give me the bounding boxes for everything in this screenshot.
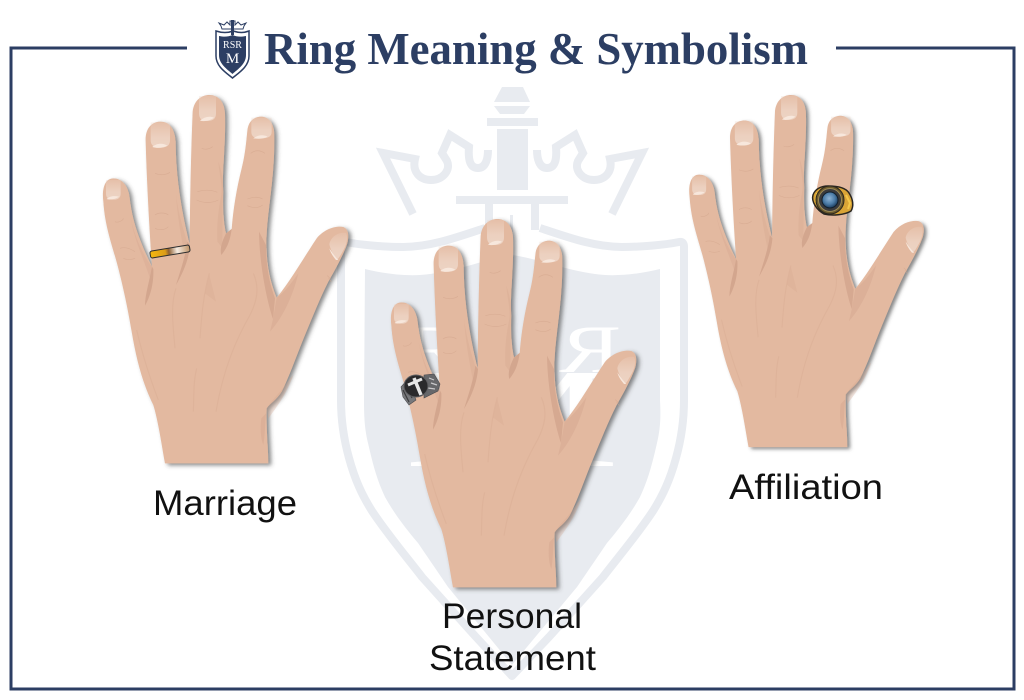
label: Marriage: Marriage — [153, 484, 297, 523]
watermark: monogram: R — [404, 311, 467, 387]
icon: class ring with blue stone — [813, 186, 853, 215]
icon: gold wedding band — [150, 245, 190, 258]
title logo: shield crest — [216, 20, 249, 78]
watermark: sword — [456, 87, 568, 232]
icon: silver cross ring — [401, 374, 440, 405]
watermark: shield crest — [341, 87, 684, 676]
label: Personal Statement: Statement — [429, 639, 596, 678]
watermark: shield outline — [341, 228, 684, 676]
label: Affiliation: Affiliation — [729, 468, 883, 507]
label: Personal Statement: Personal — [442, 597, 582, 636]
watermark: crown — [383, 135, 642, 214]
hand: Personal Statement — [391, 219, 636, 587]
watermark: monogram — [404, 311, 621, 497]
title: Ring Meaning & Symbolism — [264, 23, 808, 74]
title logo: shield crest: M — [226, 51, 239, 67]
title logo: shield crest: RSR — [223, 40, 242, 51]
watermark: inner shield — [364, 255, 660, 665]
hand: Marriage — [103, 95, 348, 463]
watermark: monogram: R — [558, 311, 621, 387]
watermark: monogram: M — [404, 339, 620, 497]
hand: Affiliation — [689, 95, 924, 447]
label: Personal Statement — [429, 597, 596, 678]
